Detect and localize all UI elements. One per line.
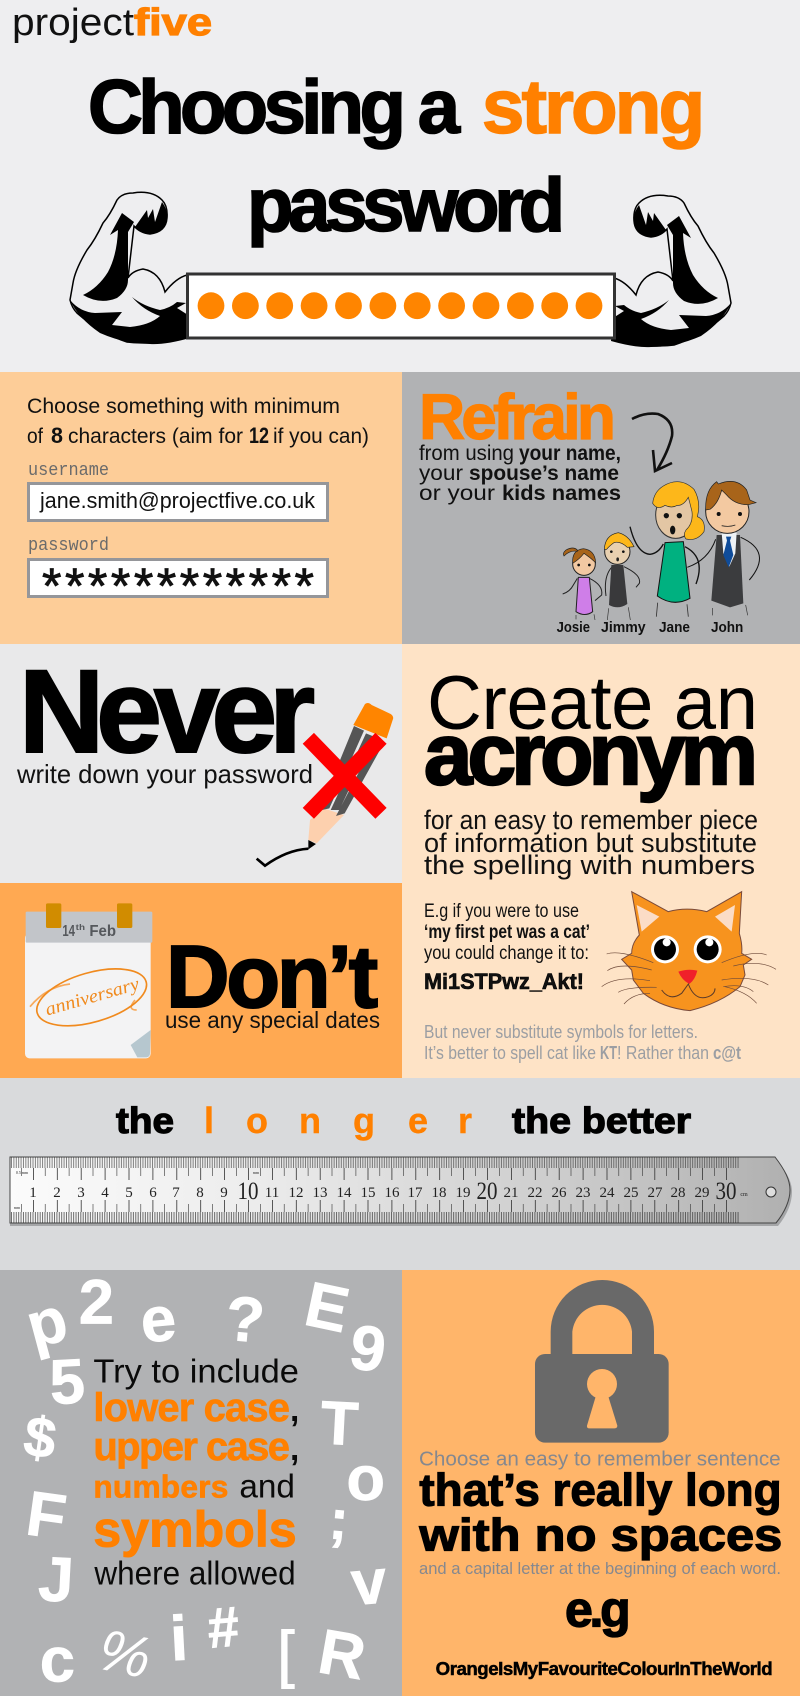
scattered letters: E <box>299 1269 355 1346</box>
heading: the longer the better <box>116 1100 691 1141</box>
username field <box>28 461 328 520</box>
figure: Jimmy <box>604 533 640 620</box>
heading: the longer the better: the <box>116 1100 174 1141</box>
instruction text: 8 <box>51 423 63 448</box>
panel: create an acronym <box>402 644 800 1078</box>
character types text: and <box>239 1469 295 1506</box>
gray sentence text: and a capital letter at the beginning of each word. <box>419 1559 781 1578</box>
refrain text <box>419 442 621 505</box>
scattered letters: ? <box>223 1284 267 1357</box>
password box with dots <box>188 274 614 338</box>
ruler numbers: 29 <box>694 1185 710 1201</box>
password field: ************ <box>42 558 314 614</box>
logo <box>12 2 212 44</box>
character types text <box>93 1353 299 1592</box>
ruler numbers: 27 <box>648 1185 663 1201</box>
character types text: numbers <box>93 1469 228 1505</box>
ruler numbers: 13 <box>312 1185 328 1201</box>
figure: John <box>687 481 759 615</box>
scattered letters: o <box>346 1444 385 1514</box>
heading: acronym: acronym <box>424 706 758 803</box>
icon: cat <box>602 892 776 1011</box>
title: Choosing a <box>88 65 461 150</box>
ruler numbers: 15 <box>360 1185 376 1201</box>
icon: calendar: anniversary <box>43 973 142 1020</box>
scattered letters: # <box>205 1595 242 1661</box>
ruler numbers: 22 <box>528 1185 542 1201</box>
logo: five <box>134 2 212 44</box>
ruler numbers: 3 <box>77 1185 85 1201</box>
symbols warning: KT <box>600 1043 617 1063</box>
icon: left flexed arm <box>70 192 190 344</box>
illustration: family <box>557 481 759 636</box>
heading: the longer the better: o <box>246 1100 268 1141</box>
username field: jane.smith@projectfive.co.uk <box>39 488 316 513</box>
heading: the longer the better: l <box>204 1100 214 1141</box>
panel: refrain <box>402 372 800 644</box>
heading: Never: Never <box>19 646 315 778</box>
scattered letters: % <box>93 1617 157 1691</box>
ruler numbers: 25 <box>624 1185 638 1201</box>
symbols warning: But never substitute symbols for letters. <box>424 1022 698 1042</box>
figure: Josie <box>563 548 602 620</box>
ruler numbers: 6 <box>149 1185 157 1201</box>
icon: right flexed arm <box>611 195 731 347</box>
ruler numbers: cm <box>740 1192 748 1198</box>
character types text: Try to include <box>93 1353 299 1390</box>
ruler numbers: 18 <box>432 1185 446 1201</box>
ruler numbers: 30 <box>716 1178 736 1205</box>
heading: Refrain: Refrain <box>419 381 616 453</box>
panel: header <box>0 0 800 372</box>
family name labels: Jane <box>659 620 690 636</box>
family name labels: Jimmy <box>601 620 646 636</box>
scattered letters: i <box>168 1604 190 1674</box>
ruler numbers: 0.5 mm <box>16 1170 29 1175</box>
title <box>88 65 705 248</box>
scattered letters <box>19 1268 390 1696</box>
heading: long sentence: that’s really long <box>419 1465 782 1516</box>
example password: OrangeIsMyFavouriteColourInTheWorld <box>436 1658 773 1679</box>
figure: Jane <box>630 482 704 617</box>
refrain text: from using <box>419 442 514 465</box>
heading: the longer the better: e <box>408 1100 428 1141</box>
heading: long sentence <box>418 1465 782 1561</box>
family name labels: John <box>711 620 743 636</box>
acronym example: Mi1STPwz_Akt! <box>424 969 584 994</box>
instruction text <box>27 395 369 448</box>
logo: project <box>12 2 134 44</box>
family name labels: Josie <box>557 620 590 636</box>
character types text: upper case <box>93 1425 290 1469</box>
title: password <box>247 163 565 248</box>
ruler <box>10 1157 792 1226</box>
panel: the longer the better <box>0 1078 800 1270</box>
title: strong <box>482 65 705 150</box>
ruler numbers: 11 <box>265 1185 279 1201</box>
refrain text: spouse’s name <box>469 462 619 485</box>
arrow <box>632 414 672 471</box>
scattered letters: 2 <box>79 1268 114 1338</box>
gray sentence text <box>419 1449 781 1578</box>
symbols warning: ! Rather than <box>617 1043 709 1063</box>
gray sentence text: Choose an easy to remember sentence <box>419 1449 781 1471</box>
scattered letters: [ <box>277 1620 295 1690</box>
icon: calendar <box>25 903 153 1058</box>
panel: long sentence <box>402 1270 800 1696</box>
panel: minimum characters <box>0 372 402 644</box>
icon: calendar: Feb <box>89 923 116 940</box>
instruction text: of <box>27 425 43 448</box>
acronym example: E.g if you were to use <box>424 901 579 922</box>
character types text: lower case <box>93 1386 290 1430</box>
username field: username <box>28 461 109 481</box>
ruler numbers: 19 <box>456 1185 470 1201</box>
ruler numbers: 20 <box>476 1178 498 1205</box>
scattered letters: v <box>348 1546 389 1619</box>
ruler numbers: 10 <box>238 1178 258 1205</box>
family name labels <box>557 620 743 636</box>
ruler numbers: 28 <box>670 1185 686 1201</box>
never subtext: write down your password <box>16 759 313 789</box>
instruction text: if you can) <box>273 425 369 448</box>
refrain text: your <box>419 462 463 485</box>
ruler numbers: mm <box>253 1170 260 1175</box>
ruler numbers: 24 <box>600 1185 615 1201</box>
ruler numbers: 21 <box>504 1185 518 1201</box>
heading: the longer the better: g <box>353 1100 375 1141</box>
refrain text: your name, <box>519 442 621 465</box>
acronym example: you could change it to: <box>424 943 589 964</box>
instruction text: Choose something with minimum <box>27 395 340 418</box>
panel: special dates <box>0 883 402 1078</box>
character types text: symbols <box>93 1502 297 1558</box>
icon: crossed-out pencil <box>257 703 393 866</box>
icon: calendar: 14 <box>62 923 75 940</box>
heading: Create an: Create an <box>427 661 758 746</box>
ruler numbers: mm <box>14 1205 21 1210</box>
icon: calendar: th <box>76 923 85 932</box>
heading: Don't: Don’t <box>166 927 378 1026</box>
scattered letters: 5 <box>48 1346 87 1418</box>
e.g label: e.g <box>565 1582 631 1638</box>
ruler numbers: 16 <box>384 1185 400 1201</box>
acronym explanation: for an easy to remember piece <box>424 805 758 835</box>
ruler numbers: 9 <box>220 1185 228 1201</box>
symbols warning <box>424 1022 741 1063</box>
character types text: , <box>290 1392 299 1429</box>
refrain text: kids names <box>502 482 621 505</box>
ruler numbers: 8 <box>196 1185 204 1201</box>
symbols warning: It’s better to spell cat like <box>424 1043 596 1063</box>
symbols warning: c@t <box>713 1043 741 1063</box>
acronym explanation <box>424 805 758 880</box>
ruler numbers: 17 <box>408 1185 423 1201</box>
acronym example <box>424 901 590 994</box>
instruction text: characters (aim for <box>68 425 243 448</box>
ruler numbers: 1 <box>29 1185 37 1201</box>
scattered letters: $ <box>20 1405 60 1472</box>
scattered letters: e <box>138 1284 179 1356</box>
password field <box>28 536 328 614</box>
panel: never write down <box>0 644 402 883</box>
scattered letters: T <box>319 1388 360 1459</box>
ruler numbers: 2 <box>53 1185 61 1201</box>
password field: password <box>28 536 109 556</box>
acronym explanation: the spelling with numbers <box>424 850 755 880</box>
acronym explanation: of information but substitute <box>424 828 757 858</box>
icon: padlock <box>535 1280 669 1443</box>
instruction text: 12 <box>249 423 269 448</box>
heading: the longer the better: n <box>299 1100 321 1141</box>
scattered letters: ; <box>327 1488 351 1553</box>
ruler numbers <box>14 1170 748 1210</box>
heading: the longer the better: r <box>458 1100 472 1141</box>
scattered letters: F <box>22 1479 70 1553</box>
acronym example: ‘my first pet was a cat’ <box>424 922 590 943</box>
ruler numbers: 7 <box>172 1185 180 1201</box>
ruler numbers: 5 <box>125 1185 133 1201</box>
ruler numbers: 14 <box>336 1185 352 1201</box>
character types text: where allowed <box>93 1555 296 1592</box>
ruler numbers: 12 <box>288 1185 304 1201</box>
refrain text: or your <box>419 482 495 505</box>
ruler numbers: 23 <box>576 1185 590 1201</box>
scattered letters: p <box>19 1284 75 1362</box>
scattered letters: c <box>40 1626 75 1696</box>
heading: long sentence: with no spaces <box>418 1510 782 1561</box>
character types text: , <box>290 1431 299 1468</box>
heading: the longer the better: the better <box>512 1100 691 1141</box>
scattered letters: J <box>37 1544 76 1616</box>
ruler numbers: 4 <box>101 1185 109 1201</box>
scattered letters: R <box>313 1617 371 1693</box>
scattered letters: 9 <box>346 1312 390 1386</box>
ruler numbers: 26 <box>552 1185 567 1201</box>
dates subtext: use any special dates <box>165 1007 380 1033</box>
panel: character types <box>0 1268 402 1696</box>
